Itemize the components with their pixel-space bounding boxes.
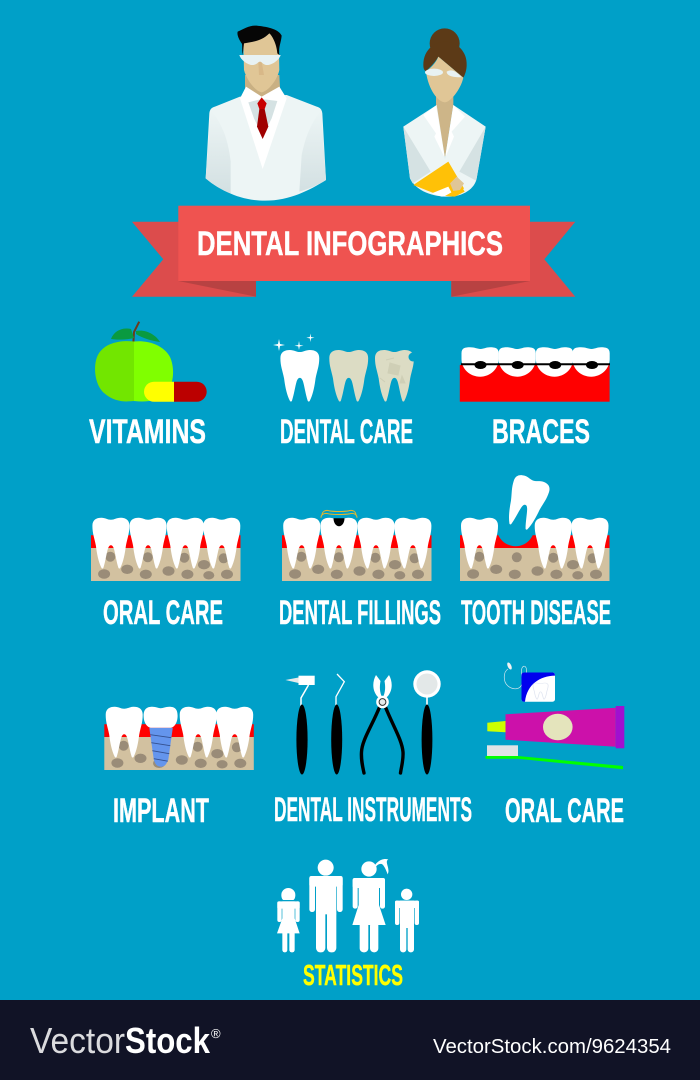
wire [461, 363, 610, 365]
tube label [543, 714, 573, 740]
label: implant: IMPLANT [113, 792, 209, 830]
floating extracted tooth [501, 473, 551, 533]
male doctor [206, 26, 326, 201]
collar and lapels [240, 87, 287, 169]
toothpaste tube [506, 708, 616, 747]
toothbrush handle [486, 756, 623, 769]
icon: dental care teeth [273, 334, 418, 401]
gum [460, 365, 610, 402]
icon: tooth disease row [460, 518, 610, 581]
apple left [95, 341, 134, 401]
floss tip [506, 662, 513, 670]
female doctor [403, 28, 486, 197]
icon: family [277, 859, 419, 952]
brackets [474, 361, 598, 369]
leaves [111, 328, 160, 342]
healthy tooth [280, 350, 319, 401]
socket [496, 518, 534, 546]
folder [413, 162, 465, 197]
boy [395, 889, 419, 952]
woman [352, 859, 388, 952]
footer logo [30, 1020, 221, 1061]
lapels [423, 105, 465, 158]
label: vitamins: VITAMINS [89, 413, 206, 451]
footer bar [0, 1000, 700, 1080]
neck [436, 95, 453, 158]
banner left tail [132, 222, 256, 297]
floss box [522, 672, 555, 702]
footer logo: ® [211, 1026, 221, 1041]
nose [258, 62, 264, 75]
implant screw [149, 728, 173, 767]
glasses [239, 55, 281, 65]
banner [132, 206, 575, 297]
banner left fold [178, 281, 256, 297]
glasses [425, 69, 462, 77]
decayed tooth [375, 350, 418, 401]
neck [245, 75, 280, 98]
tie [257, 97, 268, 139]
icon: implant row [104, 707, 254, 770]
toothbrush head [487, 745, 518, 756]
icon: braces [460, 347, 610, 402]
cavity [334, 518, 344, 526]
tube end [616, 706, 624, 748]
yellowed tooth [329, 350, 368, 401]
footer id: VectorStock.com/9624354 [433, 1036, 671, 1058]
footer logo: Vector [30, 1020, 125, 1061]
sparkles [273, 334, 314, 351]
icon: dental instruments [285, 670, 441, 774]
girl [277, 888, 300, 952]
face [426, 57, 463, 102]
jacket [403, 105, 486, 197]
shirt [248, 99, 277, 137]
banner right fold [451, 281, 530, 297]
hair [423, 42, 467, 78]
icon: oral care teeth row [91, 518, 240, 581]
icon: dental fillings row [282, 510, 432, 581]
bun [430, 28, 460, 58]
stem [133, 322, 139, 342]
label: dental instruments: DENTAL INSTRUMENTS [274, 791, 472, 829]
icon: apple and pill [95, 322, 207, 402]
banner right tail [451, 222, 575, 297]
icon: oral care products [486, 662, 624, 769]
jacket [206, 95, 326, 201]
face [243, 32, 279, 92]
apple right [134, 341, 173, 401]
floss thread [504, 666, 527, 689]
mirror [413, 670, 441, 774]
label: dental care: DENTAL CARE [280, 413, 413, 451]
label: dental fillings: DENTAL FILLINGS [279, 594, 441, 632]
label: oral care: ORAL CARE [103, 594, 223, 632]
toothpaste cap [487, 721, 506, 732]
banner main [178, 206, 530, 281]
heat waves [321, 510, 357, 518]
label: statistics: STATISTICS [303, 960, 403, 992]
label: braces: BRACES [492, 413, 590, 451]
probe [331, 674, 344, 774]
drill [285, 676, 315, 774]
pliers [361, 675, 403, 773]
crown [144, 707, 178, 728]
man [309, 860, 343, 952]
hair [237, 26, 282, 55]
title: DENTAL INFOGRAPHICS [197, 225, 503, 263]
footer logo: Stock [125, 1020, 211, 1061]
crowns [462, 347, 610, 377]
pill [144, 382, 207, 402]
